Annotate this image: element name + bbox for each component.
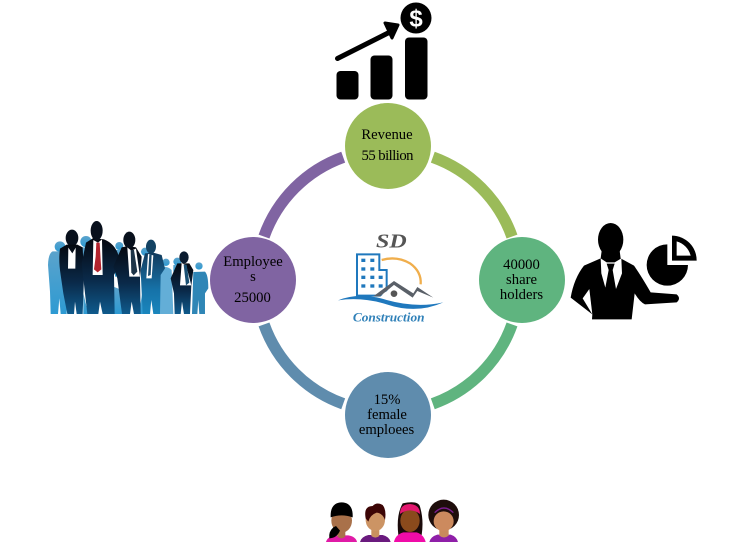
arc: revenue to shareholders bbox=[433, 157, 512, 237]
node: revenue: Revenue bbox=[361, 127, 413, 143]
building bbox=[357, 254, 387, 296]
node: share holders bbox=[479, 237, 565, 323]
woman 3 bbox=[394, 502, 426, 542]
person: mid blue bbox=[141, 240, 165, 314]
pie chart bbox=[647, 236, 697, 286]
arc: employees to revenue bbox=[264, 157, 343, 237]
logo text: SD: SD bbox=[376, 231, 407, 253]
ring arcs bbox=[264, 157, 512, 404]
sun arc bbox=[382, 258, 421, 284]
woman 4 bbox=[428, 500, 459, 542]
node: share holders: 40000 bbox=[503, 257, 540, 273]
wave bbox=[338, 296, 443, 309]
node: female employees: female bbox=[367, 407, 407, 423]
icon: businessman with pie chart bbox=[571, 223, 697, 319]
icon: business team bbox=[48, 221, 208, 314]
node: share holders: holders bbox=[500, 287, 543, 303]
background silhouettes bbox=[48, 236, 208, 314]
person: center with red tie bbox=[82, 221, 120, 314]
person: right of center bbox=[113, 232, 142, 314]
logo: SD Construction bbox=[338, 231, 443, 325]
node: employees bbox=[210, 237, 296, 323]
woman 1 bbox=[326, 502, 357, 542]
house roofs bbox=[373, 281, 433, 298]
icon: revenue growth chart bbox=[336, 2, 432, 100]
node: female employees: emploees bbox=[359, 422, 414, 438]
person: small right bbox=[171, 251, 193, 314]
woman 2 bbox=[360, 504, 391, 542]
logo text: Construction: Construction bbox=[353, 311, 425, 325]
node: employees: s bbox=[250, 269, 256, 285]
businessman bbox=[571, 223, 679, 319]
node: female employees bbox=[345, 372, 431, 458]
node: employees: Employee bbox=[223, 254, 283, 270]
icon: four women bbox=[326, 500, 459, 542]
arc: female employees to employees bbox=[264, 324, 343, 404]
node: revenue: 55 billion bbox=[362, 148, 414, 164]
node: employees: 25000 bbox=[234, 290, 271, 306]
node: female employees: 15% bbox=[374, 392, 400, 408]
icon: revenue growth chart: $ bbox=[409, 6, 423, 32]
node: revenue bbox=[345, 103, 431, 189]
person: far left bbox=[59, 230, 84, 314]
arc: shareholders to female employees bbox=[433, 324, 512, 404]
node: share holders: share bbox=[506, 272, 537, 288]
